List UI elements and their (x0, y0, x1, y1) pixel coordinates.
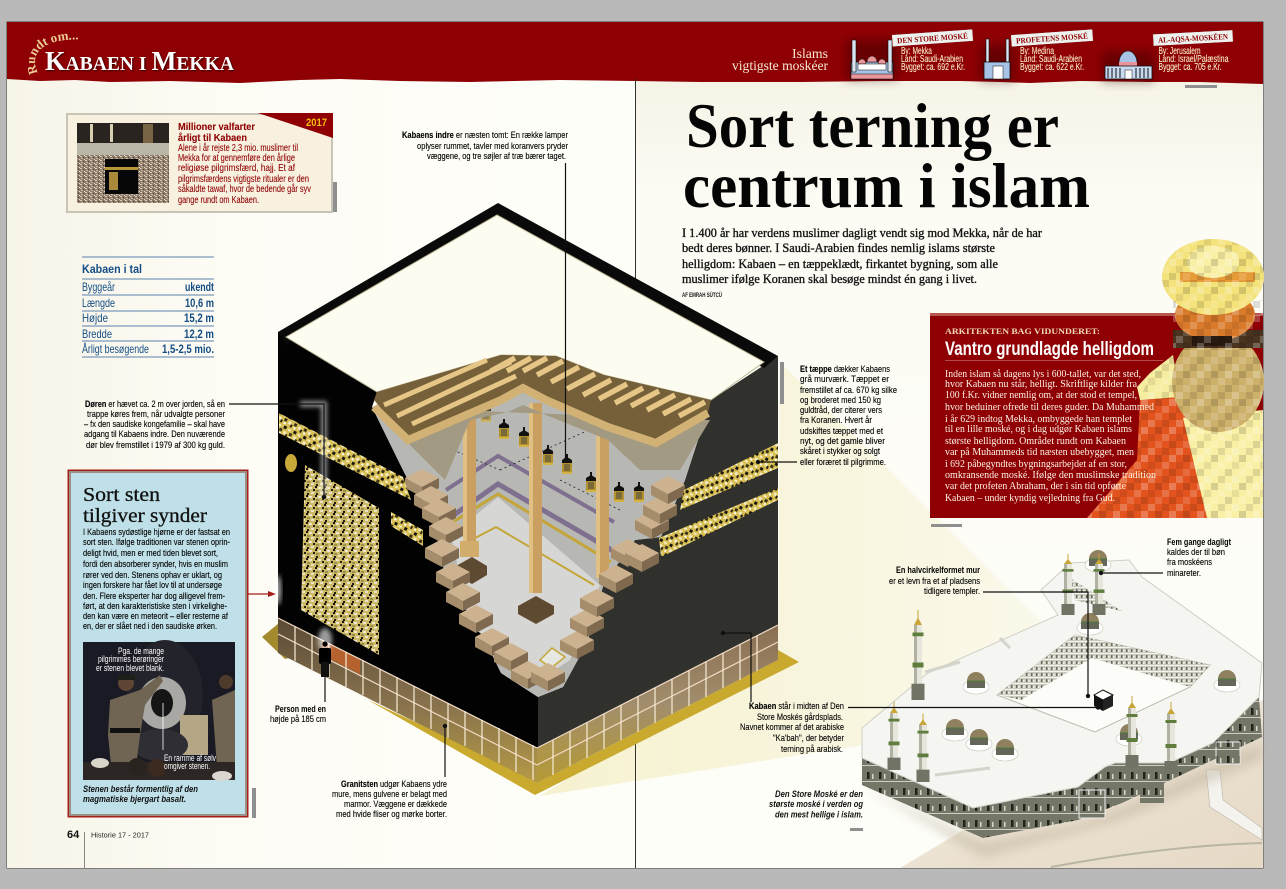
illustration: Kaaba cutaway cube (262, 203, 799, 795)
text: Kaaba location annotation: "Ka'bah", der betyder (773, 733, 844, 744)
tab: year 2017 (258, 113, 333, 138)
body text: Kabaen – under kyndig vejledning fra Gud. (945, 492, 1115, 504)
text: carpet annotation: fra Koranen. Hvert år (800, 415, 872, 426)
text: interior annotation: oplyser rummet, tavler med koranvers pryder (417, 141, 568, 152)
band: gold kiswa belt, left (279, 413, 423, 546)
caption (83, 784, 198, 804)
body text: ført, at den karakteristiske sten i virkelighe- (83, 601, 227, 612)
body text: rører ved den. Stenens ophav er uklart, og (83, 570, 222, 581)
text: intro: I 1.400 år har verdens muslimer dagligt vendt sig mod Mekka, når de har (682, 225, 1043, 240)
text: interior annotation: Kabaens indre er næsten tomt: En række lamper (402, 130, 568, 141)
table: Kabaen i tal: Kabaen i tal (82, 262, 142, 276)
arrow: red pointer to stone (248, 575, 281, 605)
body text: omkransende moské. Ifølge den muslimske tradition (945, 469, 1156, 481)
title: Sort terning er centrum i islam (683, 91, 1090, 221)
text: granite annotation: mure, mens gulvene er belagt med (332, 789, 447, 800)
text: Kaaba location annotation: Kabaen står i midten af Den (749, 701, 844, 712)
body text (83, 527, 230, 632)
icon: person silhouette (318, 628, 332, 677)
text: interior annotation (402, 130, 568, 162)
table: Kabaen i tal: ukendt (185, 280, 214, 294)
text: granite annotation: marmor. Væggene er dækkede (344, 799, 447, 810)
body text: deligt hvid, men er med tiden blevet sort, (83, 548, 218, 559)
interior: grey backing (372, 355, 711, 697)
body text (945, 368, 1156, 504)
domes (942, 550, 1240, 761)
illustration: The Great Mosque (862, 550, 1262, 858)
text: wall annotation (889, 565, 980, 597)
tag and facts: Den Store Moské: Land: Saudi-Arabien (901, 54, 963, 65)
header title: Rundt om: Rundt om... (28, 34, 78, 76)
text: door annotation: adgang til Kabaens indre. Den nuværende (84, 429, 225, 440)
tag and facts: Den Store Moské: Bygget: ca. 692 e.Kr. (901, 62, 965, 73)
icon: medallion on the wall (285, 454, 297, 472)
caption: Great Mosque (769, 789, 863, 820)
tag and facts: Profetens Moské: By: Medina (1020, 46, 1054, 57)
text: Kaaba location annotation (740, 701, 844, 755)
body text: var på Muhammeds tid næsten ubebygget, men (945, 446, 1134, 458)
caption: Great Mosque: den mest hellige i islam. (775, 810, 863, 820)
body text: ingen forskere har fået lov til at undersøge (83, 580, 222, 591)
text: granite annotation (332, 779, 447, 820)
icon: mosque Al-Aqsa (1102, 51, 1154, 82)
printer marks: grey crop bars (252, 85, 1217, 831)
text: news item: årligt til Kabaen (178, 132, 247, 144)
title: Sort terning er centrum i islam: centrum i islam (683, 151, 1090, 221)
body text: i år 629 indtog Mekka, ombyggede han templet (945, 413, 1132, 425)
text: intro (682, 225, 1043, 299)
body text: den. Flere eksperter har dog alligevel frem- (83, 591, 225, 602)
text: intro: helligdom: Kabaen – en tæppeklædt, firkantet bygning, som alle (682, 256, 998, 271)
text: wall annotation: En halvcirkelformet mur (896, 565, 980, 576)
tag and facts: Profetens Moské: Land: Saudi-Arabien (1020, 54, 1082, 65)
leader lines (229, 163, 1163, 777)
table: Kabaen i tal: 1,5-2,5 mio. (162, 342, 214, 356)
mosque roof (862, 560, 1262, 808)
body text: til en lille moské, og i dag udgør Kabaen islams (945, 423, 1132, 435)
text: news item: pilgrimsfærdens vigtigste ritualer er den (178, 173, 309, 185)
roof: wood ceiling section (372, 355, 711, 480)
text: news item: gange rundt om Kabaen. (178, 194, 259, 206)
base: granite tiles, left (278, 618, 537, 783)
text: carpet annotation: og broderet med 150 kg (800, 395, 881, 406)
text: carpet annotation: Et tæppe dækker Kabaens (800, 364, 890, 375)
body text: Inden islam så dagens lys i 600-tallet, var det sted, (945, 368, 1141, 380)
text: person annotation (270, 704, 326, 725)
text: news item: Millioner valfarter (178, 121, 255, 133)
panel: Sort sten tilgiver synder (68, 470, 248, 816)
icon: mosque Den Store Moské (846, 40, 898, 80)
photo: pilgrims at the Kaaba (77, 123, 169, 203)
text: minaret annotation: fra moskéens (1167, 557, 1212, 568)
header band: right page (635, 22, 1263, 84)
caption: Great Mosque: Den Store Moské er den (775, 789, 863, 799)
building shadow (862, 741, 1262, 858)
tag and facts: Al-Aqsa-moskéen: Land: Israel/Palæstina (1158, 54, 1229, 65)
interior: cut stone blocks (405, 469, 685, 691)
icon: mosque Profetens Moské (980, 39, 1014, 81)
road (1206, 770, 1262, 840)
text: wall annotation: tidligere templer. (924, 586, 980, 597)
sand ground under mosque (900, 700, 1263, 868)
header text: Islams vigtigste moskéer: vigtigste moskéer (732, 59, 828, 74)
table: Kabaen i tal: Længde (82, 296, 115, 310)
tag and facts: Al-Aqsa-moskéen (1153, 30, 1233, 73)
text: door annotation (84, 399, 225, 451)
text: Kaaba location annotation: Navnet kommer af det arabiske (740, 722, 844, 733)
header text: Islams vigtigste moskéer: Islams (792, 47, 828, 62)
text: wall annotation: er et levn fra et af pladsens (889, 576, 980, 587)
shadows on roof (925, 638, 1010, 775)
tag and facts: Al-Aqsa-moskéen: AL-AQSA-MOSKÉEN (1158, 31, 1228, 45)
photo: black stone with guards: pilgrimmes berøringer (98, 654, 164, 664)
text: carpet annotation: grå murværk. Tæppet er (800, 374, 889, 385)
table: Kabaen i tal: Bredde (82, 327, 112, 341)
body text: var det profeten Abraham, der i sin tid opførte (945, 480, 1126, 492)
interior: floor (451, 497, 600, 680)
text: minaret annotation (1167, 537, 1232, 579)
body text: sort sten. Ifølge traditionen var stenen oprin- (83, 537, 230, 548)
upper arcade (1070, 578, 1125, 612)
header text: Islams vigtigste moskéer (732, 47, 828, 74)
text: carpet annotation: udskiftes tæppet med et (800, 426, 883, 437)
table: Kabaen i tal (82, 257, 214, 357)
minarets (888, 554, 1178, 782)
text: person annotation: højde på 185 cm (270, 714, 326, 725)
tab: year 2017: 2017 (306, 117, 327, 129)
ground curve (1051, 843, 1262, 867)
text: carpet annotation: nyt, og det gamle bliver (800, 436, 885, 447)
panel: Vantro grundlagde helligdom (930, 238, 1264, 518)
tag and facts: Al-Aqsa-moskéen: By: Jerusalem (1158, 46, 1200, 57)
text: door annotation: dør blev fremstillet i 1979 af 300 kg guld. (86, 440, 225, 451)
body text: største helligdom. Området rundt om Kabaen (945, 435, 1126, 447)
photo: black stone with guards: En ramme af sølv (164, 753, 216, 763)
body text: fordi den absorberer synder, hvis en muslim (83, 559, 228, 570)
caption: Stenen består formentlig af den (83, 784, 198, 794)
interior: wall stripes (430, 425, 620, 668)
text: carpet annotation (800, 364, 897, 468)
interior: three wooden columns (456, 403, 609, 624)
heading: Vantro grundlagde helligdom (945, 339, 1154, 360)
body text: hvor beduiner ofrede til deres guder. Da Muhammed (945, 401, 1154, 413)
icon: small Kaaba in courtyard (1094, 690, 1113, 711)
text: interior annotation: væggene, og tre søjler af træ bærer taget. (427, 151, 566, 162)
table: Kabaen i tal: 12,2 m (184, 327, 214, 341)
centre fold line (635, 79, 636, 868)
interior: hanging lanterns (481, 402, 644, 502)
text: carpet annotation: guldtråd, der citerer vers (800, 405, 882, 416)
tag and facts: Den Store Moské: By: Mekka (901, 46, 932, 57)
heading (83, 484, 207, 527)
body text: den kan være en meteorit – eller resterne af (83, 611, 228, 622)
text: intro: bedt deres bønner. I Saudi-Arabien findes nemlig islams største (682, 240, 995, 255)
text: granite annotation: Granitsten udgør Kabaens ydre (341, 779, 447, 790)
mosque wall gate towers (1079, 742, 1240, 818)
table: Kabaen i tal: 15,2 m (184, 311, 214, 325)
folio: page number: 64 (67, 829, 80, 841)
panel: 2017 news box (67, 113, 333, 212)
text: news item (178, 121, 312, 206)
tag and facts: Profetens Moské (1011, 29, 1093, 73)
text: granite annotation: med hvide fliser og mørke borter. (336, 809, 447, 820)
text: intro: muslimer ifølge Koranen skal besøge mindst én gang i livet. (682, 271, 977, 286)
body text: 100 f.Kr. vidner nemlig om, at der stod et tempel, (945, 389, 1137, 401)
text: minaret annotation: Fem gange dagligt (1167, 537, 1232, 548)
tag and facts: Profetens Moské: Bygget: ca. 622 e.Kr. (1020, 62, 1084, 73)
caption: Great Mosque: største moské i verden og (769, 799, 863, 809)
roof: black rim (278, 203, 778, 368)
body text: hvor Kabaen nu står, helligt. Skriftlige kilder fra (945, 378, 1137, 390)
photo: black stone with guards (83, 640, 235, 781)
text: news item: såkaldte tawaf, hvor de bedende går syv (178, 183, 312, 195)
text: Kaaba location annotation: Store Moskés gårdsplads. (757, 712, 843, 723)
courtyard (997, 635, 1210, 732)
table: Kabaen i tal: Byggeår (82, 280, 115, 294)
tag and facts: Den Store Moské: DEN STORE MOSKÉ (897, 31, 968, 45)
text: minaret annotation: kaldes der til bøn (1167, 547, 1225, 558)
text: minaret annotation: minareter. (1167, 568, 1201, 579)
header band: left page (7, 22, 635, 83)
roof: white top (286, 215, 764, 400)
folio: page number: Historie 17 - 2017 (91, 832, 149, 840)
caption: magmatiske bjergart basalt. (83, 794, 186, 804)
text: door annotation: Døren er hævet ca. 2 m over jorden, så en (85, 399, 225, 410)
table: Kabaen i tal: Højde (82, 311, 108, 325)
base: granite tiles, right (537, 625, 778, 783)
text: carpet annotation: skåret i stykker og solgt (800, 446, 880, 457)
heading: tilgiver synder (83, 505, 207, 527)
text: person annotation: Person med en (275, 704, 326, 715)
table: Kabaen i tal: Årligt besøgende (82, 341, 149, 356)
body text: I Kabaens sydøstlige hjørne er der fastsat en (83, 527, 230, 538)
table: Kabaen i tal: 10,6 m (185, 296, 214, 310)
body text: i 692 påbegyndtes bygningsarbejdet af en stor, (945, 458, 1127, 470)
pale light beam behind mosque (540, 362, 1042, 796)
heading: Sort sten (83, 484, 160, 506)
illustration: pixelated portrait of Muhammed (1087, 238, 1264, 518)
kicker: ARKITEKTEN BAG VIDUNDERET: (945, 326, 1100, 336)
band: gold kiswa belts, right (659, 443, 778, 557)
tag and facts: Al-Aqsa-moskéen: Bygget: ca. 705 e.Kr. (1158, 62, 1222, 73)
text: carpet annotation: fremstillet af ca. 670 kg silke (800, 385, 897, 396)
text: door annotation: trappe køres frem, når udvalgte personer (87, 409, 225, 420)
arcade (997, 635, 1210, 700)
floor: gold plinth (262, 623, 799, 795)
photo: black stone with guards: Pga. de mange (118, 646, 164, 656)
tag and facts: Den Store Moské (892, 29, 973, 73)
text: carpet annotation: eller foræret til pilgrimme. (800, 457, 886, 468)
body text: en, der er slået ned i den saudiske ørken. (83, 621, 217, 632)
text: news item: Mekka for at gennemføre den årlige (178, 152, 295, 164)
photo: black stone with guards: er stenen blevet blank. (96, 663, 164, 673)
folio: page number (67, 829, 149, 868)
text: intro: AF EMRAH SÜTCÜ (682, 292, 722, 299)
tag and facts: Profetens Moské: PROFETENS MOSKÉ (1016, 31, 1088, 45)
wall: left black wall (278, 332, 538, 748)
mosque outer wall (862, 697, 1262, 838)
text: news item: Alene i år rejste 2,3 mio. muslimer til (178, 142, 298, 154)
text: news item: religiøse pilgrimsfærd, hajj. Et af (178, 162, 295, 174)
photo: black stone with guards: omgiver stenen. (164, 761, 210, 771)
text: door annotation: – fx den saudiske kongefamilie – skal have (84, 419, 225, 430)
wall: right dark wall (538, 356, 778, 748)
door: gold curtain (301, 465, 379, 655)
text: Kaaba location annotation: terning på arabisk. (781, 744, 843, 755)
title: Sort terning er centrum i islam: Sort terning er (686, 91, 1059, 161)
header title: Kabaen i Mekka: KABAEN I MEKKA (45, 46, 235, 76)
